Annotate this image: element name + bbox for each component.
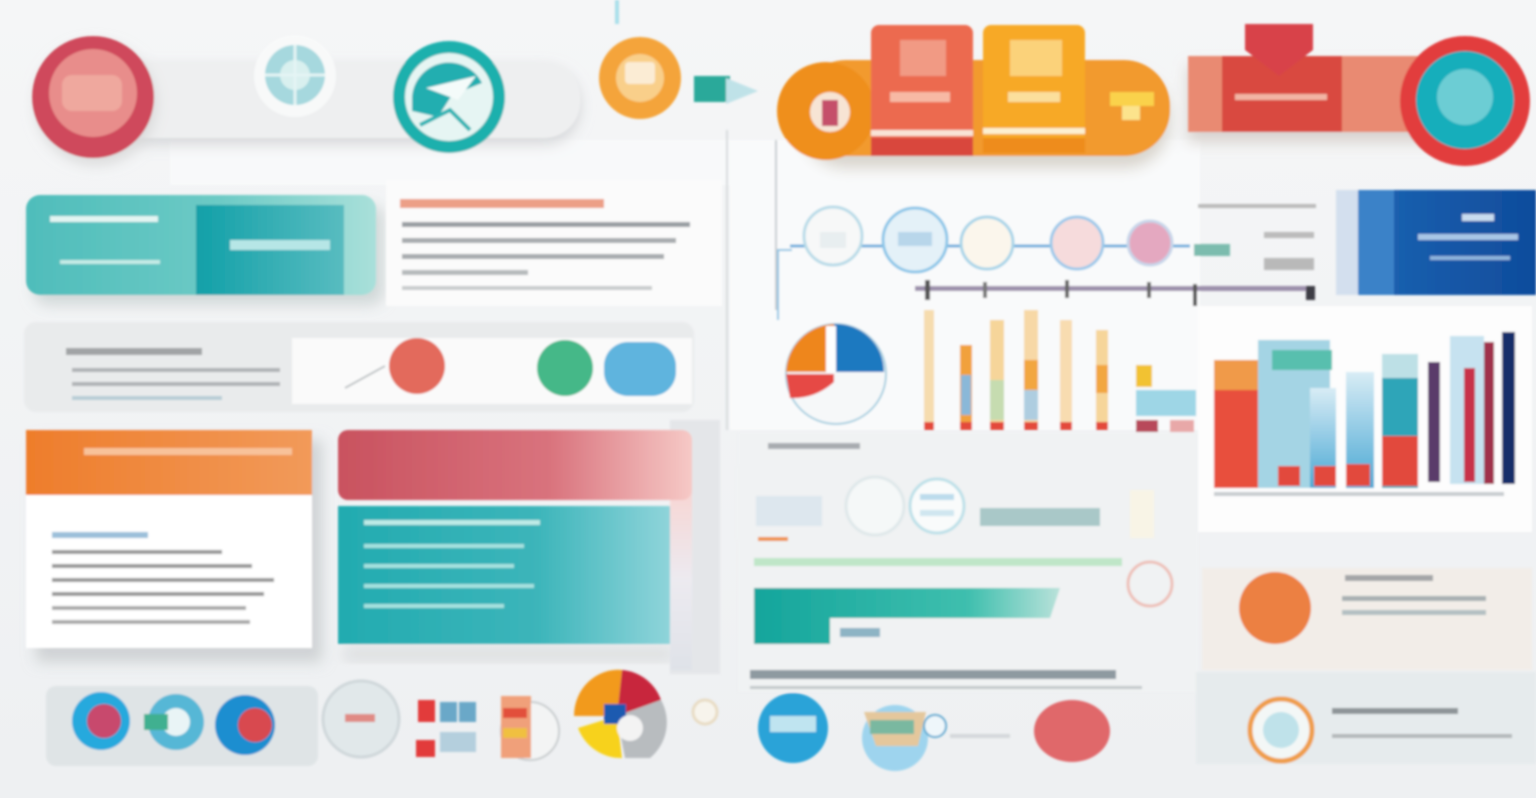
icon: globe	[254, 35, 336, 117]
panel: red ribbon with teal circle	[1188, 24, 1530, 166]
card: red	[871, 25, 973, 156]
icon: circle two	[144, 694, 204, 750]
panel: process chain	[778, 204, 1316, 320]
pie chart: mid	[786, 324, 886, 424]
panel: lower right cards	[1196, 568, 1536, 764]
bottom middle icons	[758, 693, 1110, 771]
icon: red circle	[32, 36, 156, 164]
icon: teal red circle	[1400, 36, 1530, 166]
icon: card with arrow	[862, 705, 946, 771]
panel: blue header	[1336, 190, 1536, 295]
chart: progress banner	[750, 558, 1172, 689]
icon: blue dot	[604, 342, 676, 396]
icon: orange circle	[599, 37, 681, 119]
panel: teal header	[26, 195, 384, 305]
panel: pink and teal stack	[338, 420, 720, 674]
icon: circle three	[215, 695, 275, 755]
icon: blue swirl	[758, 693, 828, 763]
panel: icon row lower middle	[736, 443, 1156, 541]
icon: ring	[1250, 699, 1312, 761]
icon: red dot	[389, 338, 445, 394]
card: yellow	[983, 25, 1085, 153]
panel: top-right ribbon	[777, 25, 1170, 168]
icon: orange circle	[777, 62, 875, 160]
pie chart: large	[574, 670, 667, 758]
icon: orange blob	[1239, 572, 1311, 644]
icon: squares	[416, 700, 476, 757]
icon: teal circle	[393, 41, 505, 153]
icon: list circle	[501, 696, 559, 760]
chart: timeline bars	[915, 280, 1315, 432]
icon: coral blob	[1034, 700, 1110, 762]
icon: green dot	[537, 340, 593, 396]
panel: top-left icon strip	[32, 0, 758, 164]
chart: column panel	[1198, 306, 1532, 532]
icon: circle one	[72, 692, 130, 750]
panel: orange card	[26, 430, 322, 662]
icon: gauge	[323, 681, 399, 757]
arrow: teal	[694, 76, 758, 104]
panel: bottom icons	[46, 670, 717, 766]
panel: left mid with icons	[24, 322, 694, 412]
panel: article text	[386, 180, 722, 306]
